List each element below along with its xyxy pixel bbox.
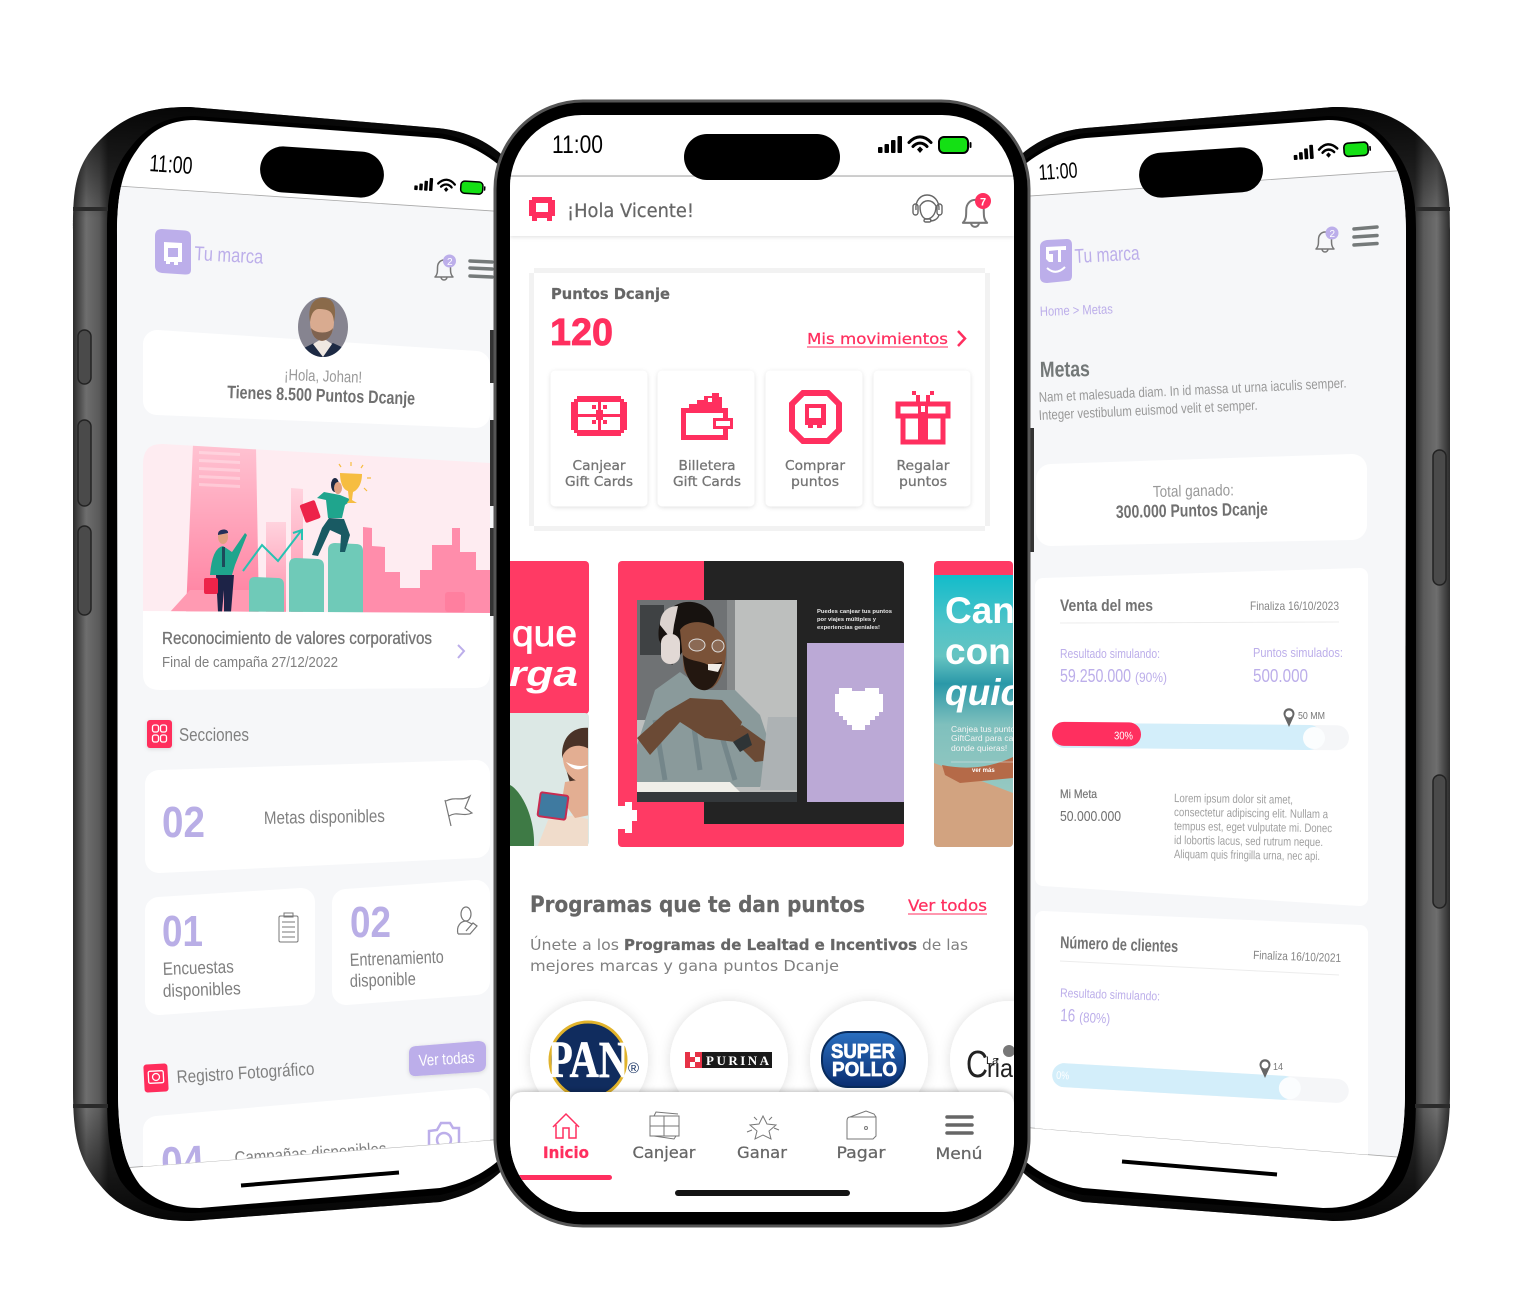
home bar: [675, 1190, 850, 1196]
action: comprar puntos: Comprar: [785, 458, 845, 474]
slide caption: experiencias geniales!: [817, 625, 880, 631]
link: ver todos: Ver todos: [908, 896, 987, 915]
nav: pagar: [836, 1111, 886, 1162]
action: billetera gift cards: Billetera: [678, 458, 736, 474]
slide caption: [817, 609, 892, 631]
banner illustration: [143, 440, 493, 615]
card: campañas: Campañas disponibles: [234, 1139, 387, 1168]
action: billetera gift cards: Gift Cards: [673, 474, 741, 490]
card: metas: 02: [162, 798, 205, 847]
card: encuestas: 01: [162, 907, 203, 956]
points value: 120: [550, 312, 613, 354]
logo: Purina: PURINA: [706, 1053, 770, 1068]
status icons: [878, 136, 972, 153]
right clipped app content: [1038, 226, 1377, 1180]
card: entrenamiento: [346, 894, 477, 991]
carousel: left slide: [505, 561, 590, 848]
button: ver todas: [409, 1041, 486, 1076]
notification bell: 7: [980, 196, 986, 208]
card: venta del mes: Resultado simulando:: [1060, 647, 1160, 661]
notification bell: 2: [447, 257, 453, 268]
card: total ganado: Total ganado:: [1153, 482, 1234, 501]
card: número de clientes: Mi Meta: [1060, 1128, 1098, 1144]
carousel: right slide: Canjea tus puntos: [951, 724, 1020, 734]
card: venta del mes: [1043, 576, 1360, 898]
left screen content: [110, 186, 505, 1190]
logo: PAN: [530, 1001, 648, 1119]
card: número de clientes: 14: [1273, 1061, 1283, 1073]
logo: PAN: ®: [628, 1060, 639, 1077]
status time: 11:00: [149, 150, 193, 180]
status time: 11:00: [1038, 157, 1078, 185]
center phone body: [495, 101, 1029, 1226]
center phone: [495, 101, 1068, 1226]
notification bell: 2: [1330, 229, 1336, 240]
campaign card: [143, 611, 490, 690]
card: venta del mes: Venta del mes: [1060, 596, 1153, 615]
nav: inicio: [543, 1114, 589, 1162]
right phone body: [1011, 107, 1450, 1221]
logo: Super Pollo: POLLO: [832, 1059, 897, 1081]
status time: 11:00: [552, 131, 603, 159]
nav: ganar: Ganar: [737, 1143, 787, 1162]
status icons: [1293, 141, 1371, 160]
logo: Super Pollo: [810, 1001, 928, 1119]
card: venta del mes: Aliquam quis fringilla urna, nec api.: [1174, 847, 1320, 863]
logo: La Cria: ria: [987, 1053, 1013, 1083]
card: número de clientes: Finaliza 16/10/2021: [1253, 948, 1342, 965]
card: venta del mes: 50.000.000: [1060, 808, 1121, 825]
brand logo: [155, 229, 191, 275]
status icons: [414, 177, 486, 195]
card: encuestas: Encuestas: [162, 957, 234, 979]
greeting text: [227, 367, 415, 409]
logo: Super Pollo: SUPER: [831, 1041, 896, 1063]
card: número de clientes: Resultado simulando:: [1060, 986, 1160, 1003]
notification bell: [963, 193, 991, 227]
right screen background: [1020, 170, 1410, 1158]
nav: canjear: [632, 1112, 696, 1162]
page description: [1040, 380, 1346, 422]
card: venta del mes: tempus est, eget vulputate mi. Donec: [1174, 819, 1332, 835]
dynamic island: [1138, 146, 1264, 199]
carousel: right slide: con: [945, 631, 1011, 672]
home bar: [241, 1172, 399, 1186]
card: entrenamiento: Entrenamiento: [349, 947, 444, 970]
logo: La Cria: [950, 1001, 1068, 1119]
card: número de clientes: 16: [1060, 1005, 1076, 1026]
page title: Metas: [1040, 356, 1090, 382]
greeting text: ¡Hola, Johan!: [284, 367, 362, 387]
greeting: ¡Hola Vicente!: [567, 201, 694, 222]
nav: menú: Menú: [936, 1144, 982, 1163]
card: total ganado: 300.000 Puntos Dcanje: [1116, 499, 1268, 522]
sections icon: [147, 720, 172, 748]
left screen background: [110, 186, 505, 1169]
panel title: Puntos Dcanje: [551, 285, 670, 303]
status divider: [510, 175, 1014, 177]
logo: PAN: PAN: [548, 1032, 628, 1089]
icon: pixel heart: [835, 688, 883, 730]
nav: canjear: Canjear: [632, 1143, 696, 1162]
dynamic island: [259, 145, 385, 199]
action: regalar puntos: puntos: [899, 474, 947, 490]
nav: inicio: Inicio: [543, 1143, 589, 1162]
notification bell: [435, 254, 456, 280]
action: comprar puntos: [766, 370, 862, 506]
action: canjear gift cards: [550, 370, 648, 506]
card: venta del mes: Puntos simulados:: [1253, 646, 1343, 660]
card: número de clientes: [1043, 919, 1360, 1180]
programs description: Programas de Lealtad e Incentivos: [624, 936, 917, 954]
greeting text: Tienes 8.500 Puntos Dcanje: [227, 382, 415, 409]
bottom navigation: [505, 1092, 1014, 1215]
breadcrumb: Home > Metas: [1040, 301, 1113, 319]
carousel: left slide: que: [512, 613, 577, 654]
card: número de clientes: (80%): [1079, 1009, 1111, 1026]
card: venta del mes: consectetur adipiscing elit. Nullam a: [1174, 805, 1328, 821]
hamburger menu: [470, 261, 492, 277]
slide caption: Puedes canjear tus puntos: [817, 609, 892, 615]
logo: [529, 197, 555, 221]
slider: clientes: 0%: [1056, 1070, 1070, 1082]
carousel: right slide: ver más: [972, 768, 995, 774]
slider: venta: 30%: [1114, 730, 1133, 742]
right phone: [1011, 107, 1450, 1221]
page description: Integer vestibulum euismod velit et semper.: [1038, 397, 1258, 423]
left clipped app content: [143, 229, 493, 1190]
card: encuestas: [159, 902, 301, 1001]
center screen content: [505, 176, 1068, 1215]
logo: Purina: [670, 1001, 788, 1119]
active tab indicator: [505, 1175, 612, 1180]
card: venta del mes: id lobortis lacus, sed rutrum neque.: [1174, 833, 1323, 849]
chevron: [458, 645, 464, 658]
action: billetera gift cards: [658, 370, 754, 506]
card: venta del mes: 50 MM: [1298, 710, 1325, 722]
carousel: right slide: [934, 561, 1032, 847]
carousel: center slide: [618, 561, 904, 847]
support icon: [913, 195, 942, 222]
app header: [510, 177, 1014, 236]
card: total ganado: [1051, 469, 1352, 531]
card: venta del mes: Finaliza 16/10/2023: [1250, 599, 1339, 613]
sections heading: Secciones: [179, 725, 249, 745]
link: mis movimientos: Mis movimientos: [807, 330, 948, 348]
card: venta del mes: Mi Meta: [1060, 787, 1097, 801]
carousel: right slide: GiftCard para canjear: [951, 733, 1032, 743]
hamburger menu: [1354, 227, 1377, 245]
campaign text: Final de campaña 27/12/2022: [162, 654, 338, 671]
card: campañas: 04: [160, 1137, 206, 1188]
greeting card: [157, 344, 476, 414]
card: entrenamiento: 02: [350, 898, 391, 947]
action: regalar puntos: [874, 370, 970, 506]
card: número de clientes: Número de clientes: [1060, 933, 1178, 956]
programs description: Únete a los: [530, 935, 619, 954]
action: comprar puntos: puntos: [791, 474, 839, 490]
card: entrenamiento: disponible: [349, 969, 416, 991]
programs description: [530, 935, 968, 975]
dynamic island: [684, 134, 840, 180]
card: campañas: [157, 1102, 476, 1190]
left phone: [73, 107, 512, 1221]
logo: La Cria: La: [986, 1055, 999, 1067]
lavender block: [807, 643, 904, 802]
button: ver todas: Ver todas: [418, 1050, 475, 1070]
home bar: [1122, 1162, 1277, 1174]
brand logo: [1040, 239, 1072, 283]
programs heading: Programas que te dan puntos: [530, 893, 865, 918]
slider: clientes: [1052, 1063, 1349, 1104]
carousel: left slide: rga: [509, 653, 578, 694]
logo: La Cria: C: [966, 1044, 988, 1086]
center phone side buttons: [490, 330, 1034, 616]
card: venta del mes: (90%): [1135, 669, 1167, 685]
notification bell: [1316, 226, 1338, 252]
right screen content: [1020, 170, 1410, 1180]
photo register heading: Registro Fotográfico: [176, 1059, 315, 1087]
programs description: de las: [922, 936, 968, 954]
card: metas: Metas disponibles: [264, 806, 385, 828]
card: venta del mes: 59.250.000: [1060, 666, 1131, 686]
campaign text: [162, 628, 432, 671]
action: canjear gift cards: Gift Cards: [565, 474, 633, 490]
slider: venta: [1052, 722, 1349, 750]
campaign text: Reconocimiento de valores corporativos: [162, 628, 432, 648]
card: venta del mes: 500.000: [1253, 666, 1308, 686]
card: encuestas: disponibles: [162, 978, 241, 1001]
slide caption: por viajes múltiples y: [817, 617, 877, 623]
card: metas: [159, 774, 476, 859]
photo register icon: [143, 1063, 169, 1093]
brand name: Tu marca: [194, 243, 265, 269]
brand name: Tu marca: [1074, 243, 1141, 268]
page description: Nam et malesuada diam. In id massa ut urna iaculis semper.: [1038, 375, 1347, 405]
nav: ganar: [737, 1116, 787, 1162]
nav: menú: [936, 1117, 982, 1163]
nav: pagar: Pagar: [836, 1143, 886, 1162]
points panel: [529, 268, 990, 531]
puzzle piece mark: [618, 802, 637, 833]
programs description: mejores marcas y gana puntos Dcanje: [530, 957, 839, 975]
left phone body: [73, 107, 512, 1221]
photo: man with headphones: [637, 600, 797, 802]
carousel: right slide: donde quieras!: [951, 743, 1007, 753]
action: canjear gift cards: Canjear: [572, 458, 626, 474]
action: regalar puntos: Regalar: [896, 458, 950, 474]
carousel: right slide: Can: [945, 590, 1015, 631]
avatar: [298, 297, 348, 357]
carousel: right slide: quic: [945, 672, 1021, 713]
card: venta del mes: Lorem ipsum dolor sit amet,: [1174, 791, 1293, 807]
